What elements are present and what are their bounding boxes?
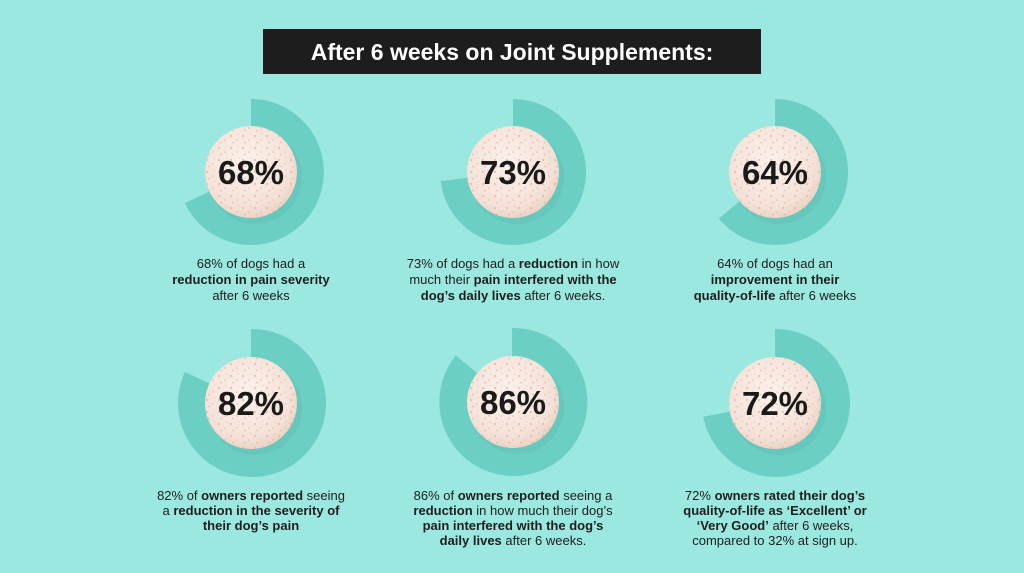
text: 68 description: 68% of dogs had a — [197, 256, 306, 271]
icon: pill 73 — [467, 126, 564, 224]
icon: pill 68 — [205, 126, 302, 224]
chart: 68% wedge — [185, 99, 324, 245]
text: 73 description: much their pain interfered with the — [409, 272, 617, 287]
panel: 86% — [413, 328, 613, 548]
text: 72 description — [683, 488, 867, 548]
text: 68 description: after 6 weeks — [212, 288, 290, 303]
chart: 73% wedge — [441, 99, 586, 245]
text: 82 description — [157, 488, 345, 533]
panel: 86%: 86% — [480, 384, 546, 421]
text: 72 description: 72% owners rated their dog’s — [685, 488, 865, 503]
icon: pill 82 — [205, 357, 302, 455]
title: After 6 weeks on Joint Supplements: — [311, 39, 713, 65]
text: 86 description: pain interfered with the dog’s — [423, 518, 603, 533]
icon: pill 72 — [729, 357, 826, 455]
panel: 72%: 72% — [742, 385, 808, 422]
text: 64 description: quality-of-life after 6 weeks — [694, 288, 857, 303]
panel: 72% — [683, 329, 867, 548]
icon: pill 86 — [467, 356, 564, 454]
chart: 64% wedge — [719, 99, 848, 245]
text: 82 description: their dog’s pain — [203, 518, 299, 533]
icon: pill 64 — [729, 126, 826, 224]
text: 82 description: 82% of owners reported seeing — [157, 488, 345, 503]
text: 68 description: reduction in pain severity — [172, 272, 331, 287]
panel: 68%: 68% — [218, 154, 284, 191]
text: 64 description — [694, 256, 857, 303]
text: 86 description: daily lives after 6 weeks. — [440, 533, 586, 548]
chart: 72% wedge — [703, 329, 850, 477]
text: 73 description: 73% of dogs had a reduction in how — [407, 256, 620, 271]
text: 73 description: dog’s daily lives after 6 weeks. — [421, 288, 605, 303]
text: 72 description: compared to 32% at sign up. — [692, 533, 858, 548]
panel: 68% — [172, 99, 331, 303]
text: 72 description: ‘Very Good’ after 6 weeks, — [697, 518, 853, 533]
panel: 82% — [157, 329, 345, 533]
panel: 64%: 64% — [742, 154, 808, 191]
chart: 86% wedge — [439, 328, 587, 476]
text: 73 description — [407, 256, 620, 303]
text: 82 description: a reduction in the severity of — [162, 503, 340, 518]
panel: 64% — [694, 99, 857, 303]
panel: 73% — [407, 99, 620, 303]
text: 64 description: 64% of dogs had an — [717, 256, 833, 271]
panel: 73%: 73% — [480, 154, 546, 191]
panel: 82%: 82% — [218, 385, 284, 422]
text: 86 description: 86% of owners reported seeing a — [414, 488, 613, 503]
text: 72 description: quality-of-life as ‘Excellent’ or — [683, 503, 867, 518]
title — [263, 29, 761, 74]
chart: 82% wedge — [178, 329, 326, 477]
text: 64 description: improvement in their — [711, 272, 839, 287]
text: 86 description — [413, 488, 613, 548]
text: 86 description: reduction in how much their dog’s — [413, 503, 613, 518]
text: 68 description — [172, 256, 331, 303]
